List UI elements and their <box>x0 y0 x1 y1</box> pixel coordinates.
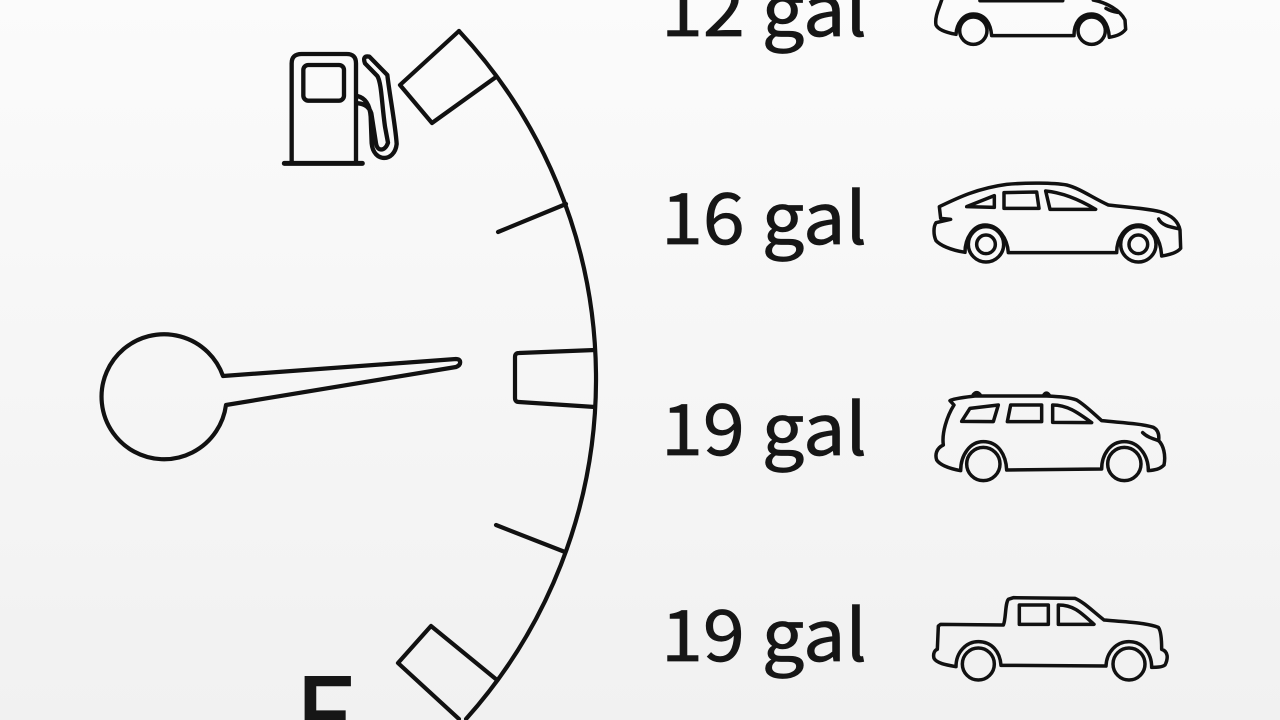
label: 16 gal: 16 gal <box>661 163 867 265</box>
icon: pickup truck <box>934 598 1167 680</box>
lower minor tick <box>496 525 565 552</box>
upper minor tick <box>498 204 566 232</box>
icon: fuel pump <box>284 54 397 163</box>
icon: SUV <box>936 393 1165 481</box>
top tick: full mark <box>400 31 496 123</box>
icon: compact car <box>936 0 1126 44</box>
needle and hub <box>102 334 460 459</box>
icon: sedan <box>934 183 1181 262</box>
bottom tick: empty mark <box>398 626 497 719</box>
fuel gauge <box>102 31 596 719</box>
label: 19 gal truck: 19 gal <box>661 580 867 682</box>
middle tick: half mark <box>515 350 595 407</box>
label: 19 gal SUV: 19 gal <box>661 374 867 476</box>
gauge arc <box>459 31 596 719</box>
